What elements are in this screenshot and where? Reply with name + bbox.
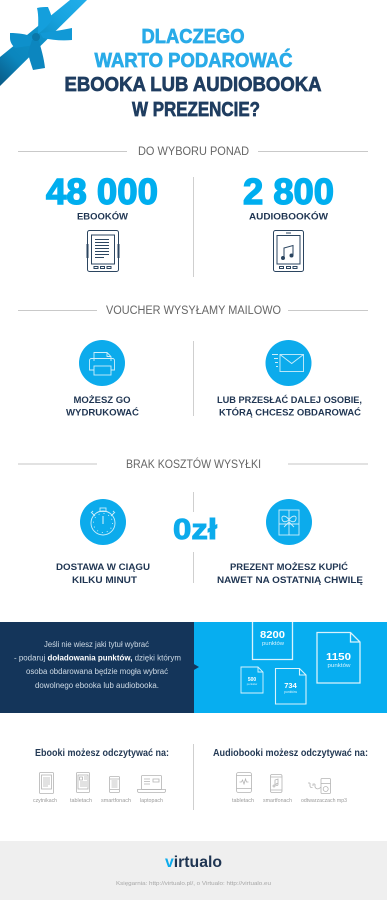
panel: ebook devices: czytnikach: [33, 798, 57, 804]
panel: audiobook devices: [213, 748, 368, 804]
voucher: 8200 points: [252, 622, 292, 660]
panel: fast delivery: [56, 499, 150, 586]
icon: laptop: [138, 776, 166, 792]
panel: points band, dark text side: Jeśli nie wiesz jaki tytuł wybrać: [44, 640, 149, 649]
price: 0 zł: 0zł: [173, 514, 217, 546]
voucher: 500 points: [241, 667, 263, 693]
heading: voucher wysyłamy mailowo: VOUCHER WYSYŁAMY MAILOWO: [106, 305, 281, 317]
voucher: 8200 points: 8200: [260, 629, 285, 641]
heading: do wyboru ponad: DO WYBORU PONAD: [138, 146, 249, 158]
voucher: 734 points: 734: [284, 681, 298, 690]
title: [64, 26, 322, 121]
panel: audiobook devices: tabletach: [232, 798, 254, 804]
heading: brak kosztów wysyłki: BRAK KOSZTÓW WYSYŁKI: [126, 458, 261, 471]
voucher: 1150 points: punktów: [328, 663, 351, 669]
panel: fast delivery: KILKU MINUT: [72, 575, 137, 586]
panel: ebook count: [46, 171, 158, 272]
footer links: Księgarnia: http://virtualo.pl/, o Virtualo: http://virtualo.eu: [116, 881, 271, 887]
title: DLACZEGO: [142, 26, 244, 48]
panel: audiobook count: [243, 171, 334, 272]
title: WARTO PODAROWAĆ: [94, 48, 292, 72]
icon: audio tablet: [274, 230, 304, 272]
icon: mp3 player: [308, 778, 330, 794]
voucher: 734 points: [276, 668, 306, 704]
panel: send voucher: LUB PRZESŁAĆ DALEJ OSOBIE,: [217, 394, 362, 406]
panel: last minute gift: [217, 499, 363, 586]
icon: printer: [79, 340, 125, 386]
panel: ebook devices: tabletach: [70, 798, 92, 804]
panel: audiobook devices: Audiobooki możesz odczytywać na:: [213, 748, 368, 759]
panel: audiobook devices: smartfonach: [263, 798, 292, 804]
icon: reader: [40, 772, 54, 794]
icon: gift: [266, 499, 312, 545]
panel: print voucher: MOŻESZ GO: [74, 395, 130, 406]
icon: stopwatch: [80, 499, 126, 545]
panel: ebook devices: laptopach: [140, 798, 163, 804]
divider: [192, 492, 194, 583]
divider: [192, 177, 194, 277]
voucher: 500 points: punktów: [247, 682, 258, 686]
panel: points band, blue vouchers side: [193, 622, 387, 713]
voucher: 734 points: punktów: [284, 690, 297, 694]
divider: [192, 744, 194, 810]
panel: ebook devices: smartfonach: [101, 798, 131, 804]
divider: [192, 341, 194, 416]
panel: last minute gift: PREZENT MOŻESZ KUPIĆ: [230, 561, 348, 573]
panel: audiobook count: 2 800: [243, 171, 334, 212]
panel: ebook count: EBOOKÓW: [77, 210, 128, 222]
title: W PREZENCIE?: [132, 99, 260, 121]
voucher: 500 points: 500: [248, 677, 256, 683]
panel: print voucher: WYDRUKOWAĆ: [66, 406, 139, 418]
voucher: 1150 points: [317, 632, 360, 683]
voucher: 8200 points: punktów: [262, 641, 284, 647]
panel: audiobook devices: odtwarzaczach mp3: [301, 798, 347, 804]
panel: audiobook count: AUDIOBOOKÓW: [249, 210, 328, 222]
panel: fast delivery: DOSTAWA W CIĄGU: [56, 562, 150, 573]
icon: e-reader: [88, 230, 118, 272]
panel: ebook count: 48 000: [46, 171, 158, 212]
icon: envelope: [266, 340, 312, 386]
panel: points band, dark text side: osoba obdarowana będzie mogła wybrać: [26, 667, 168, 676]
icon: tablet: [76, 772, 90, 792]
panel: print voucher: [66, 340, 139, 418]
icon: smartphone with note: [270, 774, 282, 792]
panel: send voucher: KTÓRĄ CHCESZ OBDAROWAĆ: [219, 406, 361, 418]
panel: points band, dark text side: dowolnego ebooka lub audiobooka.: [35, 681, 159, 690]
panel: points band, dark text side: - podaruj doładowania punktów, dzięki którym: [14, 654, 181, 662]
icon: smartphone: [110, 776, 120, 792]
panel: points band, dark text side: [0, 622, 194, 713]
icon: blue ribbon with bow: [0, 0, 87, 86]
panel: send voucher: [217, 340, 362, 418]
panel: footer: [0, 841, 387, 900]
panel: ebook devices: [33, 748, 169, 804]
voucher: 1150 points: 1150: [326, 651, 351, 663]
panel: ebook devices: Ebooki możesz odczytywać na:: [35, 748, 169, 759]
logo: virtualo: virtualo: [165, 854, 222, 871]
icon: tablet with waveform: [236, 772, 252, 792]
panel: last minute gift: NAWET NA OSTATNIĄ CHWILĘ: [217, 575, 363, 586]
title: EBOOKA LUB AUDIOBOOKA: [64, 74, 322, 96]
